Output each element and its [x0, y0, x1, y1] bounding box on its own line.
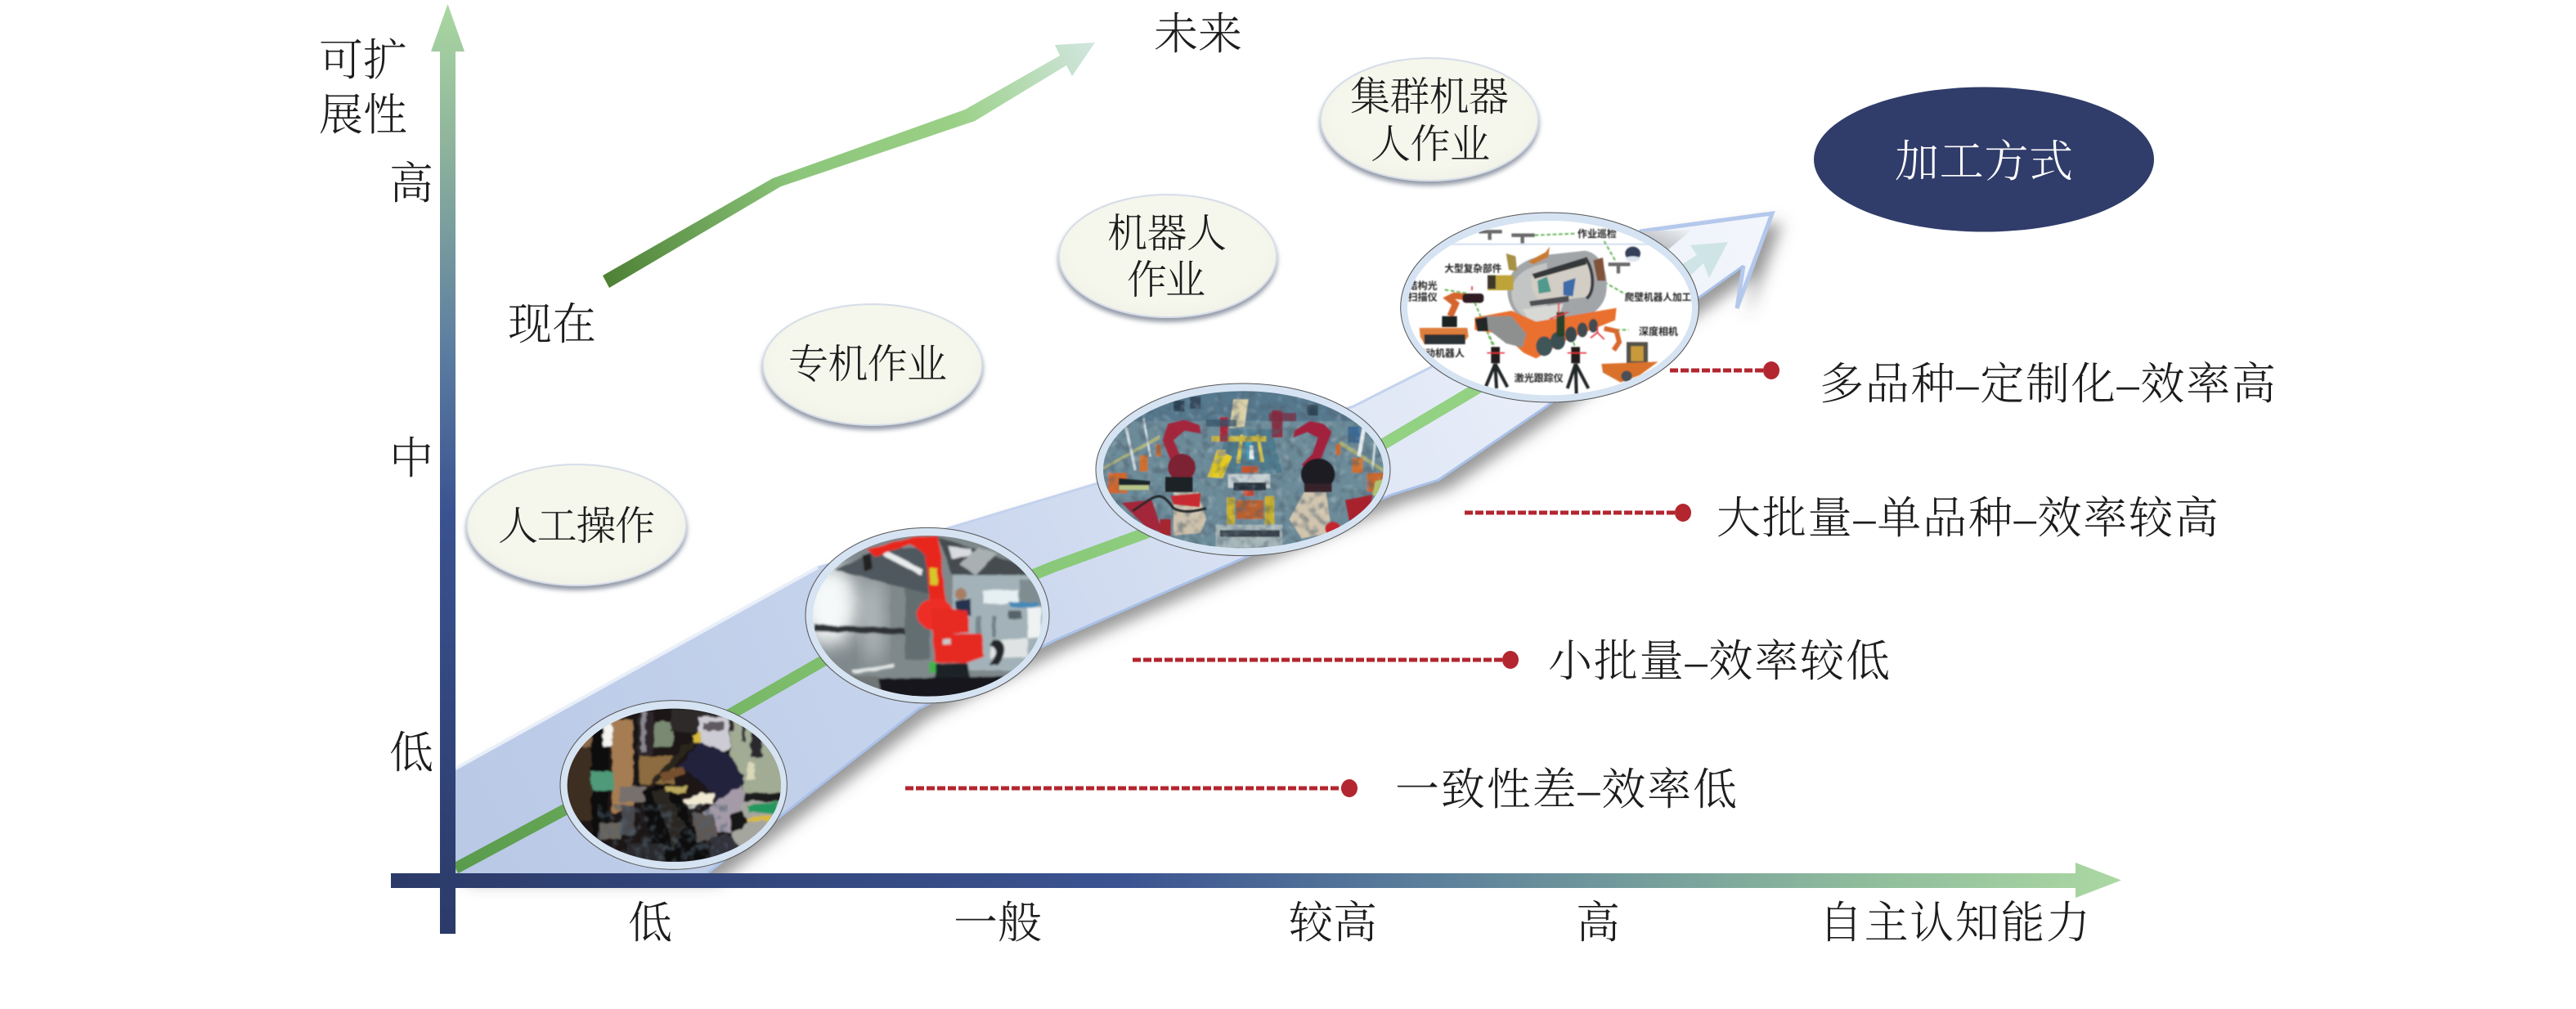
photo circle 2: single robot arm: [799, 527, 1049, 703]
embedded photo labels: 移动机器人: [1416, 347, 1465, 359]
bubble: special machine: [763, 304, 982, 425]
y label medium: 中: [389, 434, 433, 483]
navy badge: processing mode: [1814, 87, 2154, 232]
callout 2: large batch: 大批量–单品种–效率较高: [1717, 494, 2219, 543]
embedded photo labels: 大型复杂部件: [1444, 263, 1502, 275]
embedded photo labels: 结构光: [1408, 279, 1438, 291]
inner head shade: [1634, 230, 1692, 255]
inner teal arrow: [1657, 242, 1728, 296]
y label low: 低: [389, 729, 433, 778]
bubble: robot operation: [1059, 195, 1277, 317]
embedded photo labels: 爬壁机器人加工: [1625, 292, 1692, 303]
label: now: 现在: [508, 300, 596, 349]
embedded photo labels: 深度相机: [1639, 325, 1678, 337]
label: 可扩展性: 可扩: [319, 36, 407, 85]
label: 可扩展性: [319, 36, 407, 140]
x label average: 一般: [954, 899, 1042, 948]
y label high: 高: [389, 159, 433, 209]
bubble: robot operation: 机器人: [1107, 211, 1227, 256]
embedded photo labels: 作业巡检: [1577, 227, 1617, 240]
embedded photo labels: [1408, 227, 1692, 384]
callout 2: large batch: [1465, 494, 2219, 543]
photo circle 3: robot production line: [1096, 383, 1390, 556]
bubble: swarm robots: [1321, 58, 1538, 181]
navy badge: processing mode: 加工方式: [1895, 137, 2073, 186]
x label low: 低: [628, 899, 672, 948]
x label high: 高: [1576, 899, 1620, 948]
photo circle 1: manual welding: [556, 701, 793, 869]
future trend arrow: [603, 43, 1095, 288]
label: 可扩展性: 展性: [319, 91, 407, 140]
callout 3: small batch: [1133, 637, 1890, 686]
callout 1: many varieties: 多品种–定制化–效率高: [1820, 360, 2276, 409]
embedded photo labels: 激光跟踪仪: [1515, 372, 1564, 384]
bubble: swarm robots: 人作业: [1371, 122, 1490, 167]
vertical axis arrow: [431, 4, 464, 934]
big rising band arrow: [456, 213, 1772, 873]
label: future: 未来: [1154, 10, 1242, 59]
bubble: robot operation: 作业: [1127, 258, 1205, 303]
bubble: manual operation: 人工操作: [498, 504, 655, 549]
infographic canvas: [321, 4, 2273, 942]
photo circle 4: swarm robot system: [1401, 213, 1699, 402]
green progress line: [456, 372, 1505, 868]
x label fairly high: 较高: [1289, 899, 1377, 948]
callout 4: poor consistency: 一致性差–效率低: [1395, 765, 1737, 814]
horizontal axis arrow: [391, 863, 2121, 898]
callout 4: poor consistency: [905, 765, 1737, 814]
robots in line photo: [1119, 413, 1386, 536]
bubble: swarm robots: 集群机器: [1350, 74, 1509, 119]
embedded photo labels: 扫描仪: [1408, 291, 1438, 303]
bubble: manual operation: [467, 464, 686, 585]
callout 3: small batch: 小批量–效率较低: [1548, 637, 1890, 686]
x axis title: 自主认知能力: [1819, 899, 2090, 948]
bubble: special machine: 专机作业: [788, 342, 947, 387]
